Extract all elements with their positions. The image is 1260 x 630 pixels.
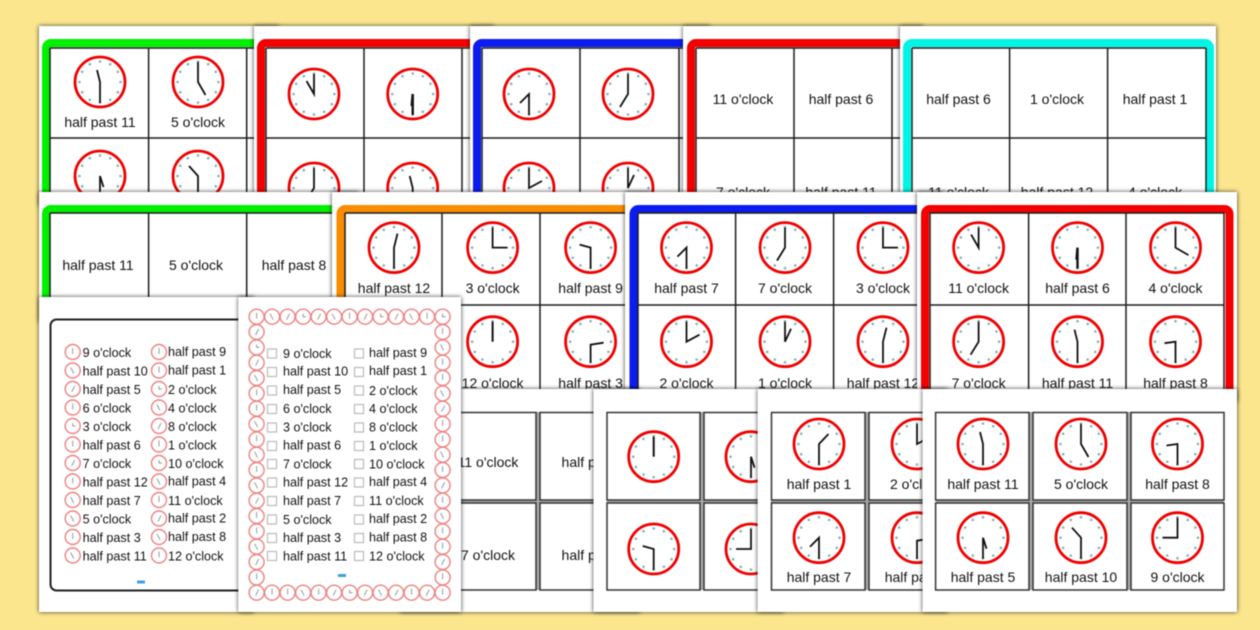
label: 12 o'clock: 12 o'clock (462, 375, 525, 391)
label: half past 9: half past 9 (558, 280, 623, 296)
label: 1 o'clock: 1 o'clock (758, 375, 813, 391)
clock: 11 o'clock (289, 69, 339, 119)
text block: first column: half past 7 (283, 494, 341, 508)
label: half past 11: half past 11 (947, 476, 1019, 492)
clock: 12 o'clock (629, 432, 679, 482)
text block: second column: half past 8 (168, 530, 226, 544)
panel: cyan word bingo board, top row (900, 26, 1216, 243)
text block: second column: half past 9 (168, 345, 226, 359)
text block: second column: half past 4 (369, 475, 427, 489)
clock: half past 3 (892, 513, 942, 563)
clock: half past 12 (369, 223, 419, 273)
label: 5 o'clock: 5 o'clock (171, 114, 226, 130)
text block: second column: 12 o'clock (168, 550, 224, 564)
label: 5 o'clock: 5 o'clock (169, 257, 224, 273)
text block: first column: half past 12 (283, 476, 348, 490)
text block: second column: 8 o'clock (168, 420, 217, 434)
text block: first column: half past 6 (83, 438, 141, 452)
text block: second column: 1 o'clock (168, 438, 217, 452)
clock: half past 10 (173, 151, 223, 201)
text block: first column: half past 11 (83, 550, 147, 564)
clock: half past 9 (566, 223, 616, 273)
clock: 12 o'clock (468, 317, 518, 367)
text block: second column: 11 o'clock (168, 494, 223, 508)
label: half past 7: half past 7 (787, 569, 852, 585)
label: 3 o'clock: 3 o'clock (856, 280, 911, 296)
label: half past 6: half past 6 (926, 91, 991, 107)
label: 11 o'clock: 11 o'clock (713, 91, 774, 107)
icons: clock bullets, second column (152, 344, 166, 563)
clock: 7 o'clock (954, 317, 1004, 367)
clock: 1 o'clock (760, 317, 810, 367)
label: half past 8: half past 8 (262, 257, 327, 273)
clock: half past 11 (75, 57, 125, 107)
text block: first column: 6 o'clock (83, 402, 132, 416)
icons: tick boxes (268, 349, 364, 560)
panel: orange clock bingo board, middle row (332, 192, 680, 449)
clock: 4 o'clock (1150, 223, 1200, 273)
label: half past 12: half past 12 (358, 280, 430, 296)
text block: second column: 2 o'clock (369, 384, 418, 398)
label: half past 6: half past 6 (809, 91, 874, 107)
text block: second column: 2 o'clock (168, 383, 217, 397)
text block: first column: 5 o'clock (83, 512, 132, 526)
clock: half past 8 (1152, 419, 1202, 469)
icons: clock bullets, first column (65, 344, 80, 563)
clock: half past 7 (662, 223, 712, 273)
clock: half past 12 (858, 317, 908, 367)
text block: first column: 9 o'clock (83, 346, 132, 360)
panel: red word bingo board, top row (683, 26, 951, 243)
text block: second column: 4 o'clock (168, 402, 217, 416)
label: 1 o'clock: 1 o'clock (1030, 91, 1085, 107)
text block: first column: half past 11 (283, 550, 347, 564)
clock: half past 5 (75, 151, 125, 201)
clock: half past 1 (794, 419, 844, 469)
panel: green clock bingo board, top row (39, 26, 306, 243)
clock: half past 6 (388, 69, 438, 119)
text block: first column: half past 12 (83, 476, 148, 490)
text block: first column: half past 10 (283, 364, 348, 378)
label: 7 o'clock: 7 o'clock (758, 280, 813, 296)
text block: second column: half past 1 (168, 364, 226, 378)
clock: 7 o'clock (289, 163, 339, 213)
label: half past 8: half past 8 (1143, 375, 1208, 391)
text block: first column: half past 6 (283, 438, 341, 452)
label: half past 11: half past 11 (1042, 375, 1113, 391)
panel: labelled clock cards sheet, front (923, 389, 1237, 612)
clock: 7 o'clock (760, 223, 810, 273)
text block: first column: 6 o'clock (283, 402, 332, 416)
panel: red clock bingo board, middle row (917, 192, 1237, 449)
text block: second column: half past 2 (369, 512, 427, 526)
clock: 3 o'clock (468, 223, 518, 273)
label: half past 11: half past 11 (805, 184, 877, 200)
clock: half past 11 (388, 163, 438, 213)
label: half past 10: half past 10 (1045, 569, 1117, 585)
clock: 1 o'clock (603, 163, 653, 213)
clock: half past 7 (794, 513, 844, 563)
label: half past 3: half past 3 (558, 375, 623, 391)
label: half past 12: half past 12 (1021, 184, 1093, 200)
label: 11 o'clock: 11 o'clock (948, 280, 1010, 296)
text block: first column: 9 o'clock (283, 347, 332, 361)
text block: second column: 8 o'clock (369, 420, 418, 434)
text block: first column: 7 o'clock (283, 458, 332, 472)
panel: labelled clock cards sheet, bottom row (758, 389, 962, 612)
text block: first column: 3 o'clock (283, 420, 332, 434)
panel: blue clock bingo board, middle row (625, 192, 974, 449)
clock: 3 o'clock (858, 223, 908, 273)
clock: half past 11 (1052, 317, 1102, 367)
text block: first column: 7 o'clock (83, 457, 132, 471)
label: 2 o'clock: 2 o'clock (890, 476, 945, 492)
panel: red clock bingo board, top row (254, 26, 521, 243)
label: 5 o'clock: 5 o'clock (1054, 476, 1109, 492)
text block: first column: half past 7 (83, 494, 141, 508)
text block: first column: half past 3 (83, 531, 141, 545)
clock: 2 o'clock (662, 317, 712, 367)
text block: first column: 3 o'clock (83, 420, 132, 434)
text block: first column: half past 5 (83, 383, 141, 397)
label: half past: half past (562, 454, 615, 470)
label: 4 o'clock: 4 o'clock (1148, 280, 1204, 296)
text block: first column: half past 10 (83, 364, 148, 378)
label: 7 o'clock: 7 o'clock (952, 375, 1007, 391)
label: half past: half past (562, 547, 615, 563)
clock: 5 o'clock (1056, 419, 1106, 469)
text block: first column: 5 o'clock (283, 513, 332, 527)
clock: 7 o'clock (603, 69, 653, 119)
border: ring of small clocks (249, 309, 450, 600)
label: half past 6: half past 6 (1045, 280, 1110, 296)
text block: second column: half past 9 (369, 346, 427, 360)
label: 11 o'clock: 11 o'clock (928, 184, 990, 200)
label: 11 o'clock: 11 o'clock (458, 454, 519, 470)
clock: 11 o'clock (954, 223, 1004, 273)
text block: second column: 11 o'clock (369, 494, 424, 508)
text block: second column: half past 1 (369, 364, 427, 378)
text block: second column: 12 o'clock (369, 550, 425, 564)
clock: 5 o'clock (173, 57, 223, 107)
clock: half past 3 (566, 317, 616, 367)
clock: half past 7 (504, 69, 554, 119)
clock: half past 9 (629, 524, 679, 574)
text block: first column: half past 5 (283, 383, 341, 397)
label: half past 3: half past 3 (885, 569, 950, 585)
text block: second column: half past 2 (168, 512, 226, 526)
label: half past 12: half past 12 (847, 375, 919, 391)
label: half past 11: half past 11 (64, 114, 136, 130)
label: 4 o'clock: 4 o'clock (1128, 184, 1183, 200)
clock: 9 o'clock (726, 524, 776, 574)
panel: clock-only cards sheet, bottom row (594, 389, 797, 612)
clock: 9 o'clock (1152, 513, 1202, 563)
clock: half past 10 (1056, 513, 1106, 563)
icon: small logo (137, 580, 145, 584)
clock: half past 6 (1052, 223, 1102, 273)
text block: second column: 10 o'clock (369, 458, 425, 472)
icon: small logo (338, 574, 346, 577)
label: 3 o'clock: 3 o'clock (466, 280, 521, 296)
text block: second column: half past 8 (369, 530, 427, 544)
label: 9 o'clock: 9 o'clock (1150, 569, 1206, 585)
panel: word cards sheet, bottom row (400, 389, 640, 612)
text block: second column: 1 o'clock (369, 439, 418, 453)
label: 7 o'clock: 7 o'clock (716, 184, 771, 200)
text block: second column: half past 4 (168, 474, 226, 488)
panel: green word bingo board, middle row (39, 192, 386, 349)
label: 7 o'clock: 7 o'clock (461, 547, 516, 563)
label: 2 o'clock: 2 o'clock (659, 375, 715, 391)
label: half past 8: half past 8 (1145, 476, 1210, 492)
panel: blue clock bingo board, top row (470, 26, 737, 243)
label: half past 5: half past 5 (951, 569, 1016, 585)
clock: half past 5 (958, 513, 1008, 563)
text block: first column: half past 3 (283, 531, 341, 545)
label: half past 7: half past 7 (654, 280, 719, 296)
label: half past 1: half past 1 (787, 476, 852, 492)
clock: 2 o'clock (504, 163, 554, 213)
clock: half past 5 (726, 432, 776, 482)
text block: second column: 10 o'clock (168, 457, 224, 471)
clock: 2 o'clock (892, 419, 942, 469)
panel: checklist with clock bullets (39, 297, 280, 612)
clock: half past 11 (958, 419, 1008, 469)
panel: checklist with clock border (238, 297, 461, 612)
label: half past 11: half past 11 (62, 257, 134, 273)
label: half past 1: half past 1 (1123, 91, 1188, 107)
text block: second column: 4 o'clock (369, 402, 418, 416)
clock: half past 8 (1150, 317, 1200, 367)
